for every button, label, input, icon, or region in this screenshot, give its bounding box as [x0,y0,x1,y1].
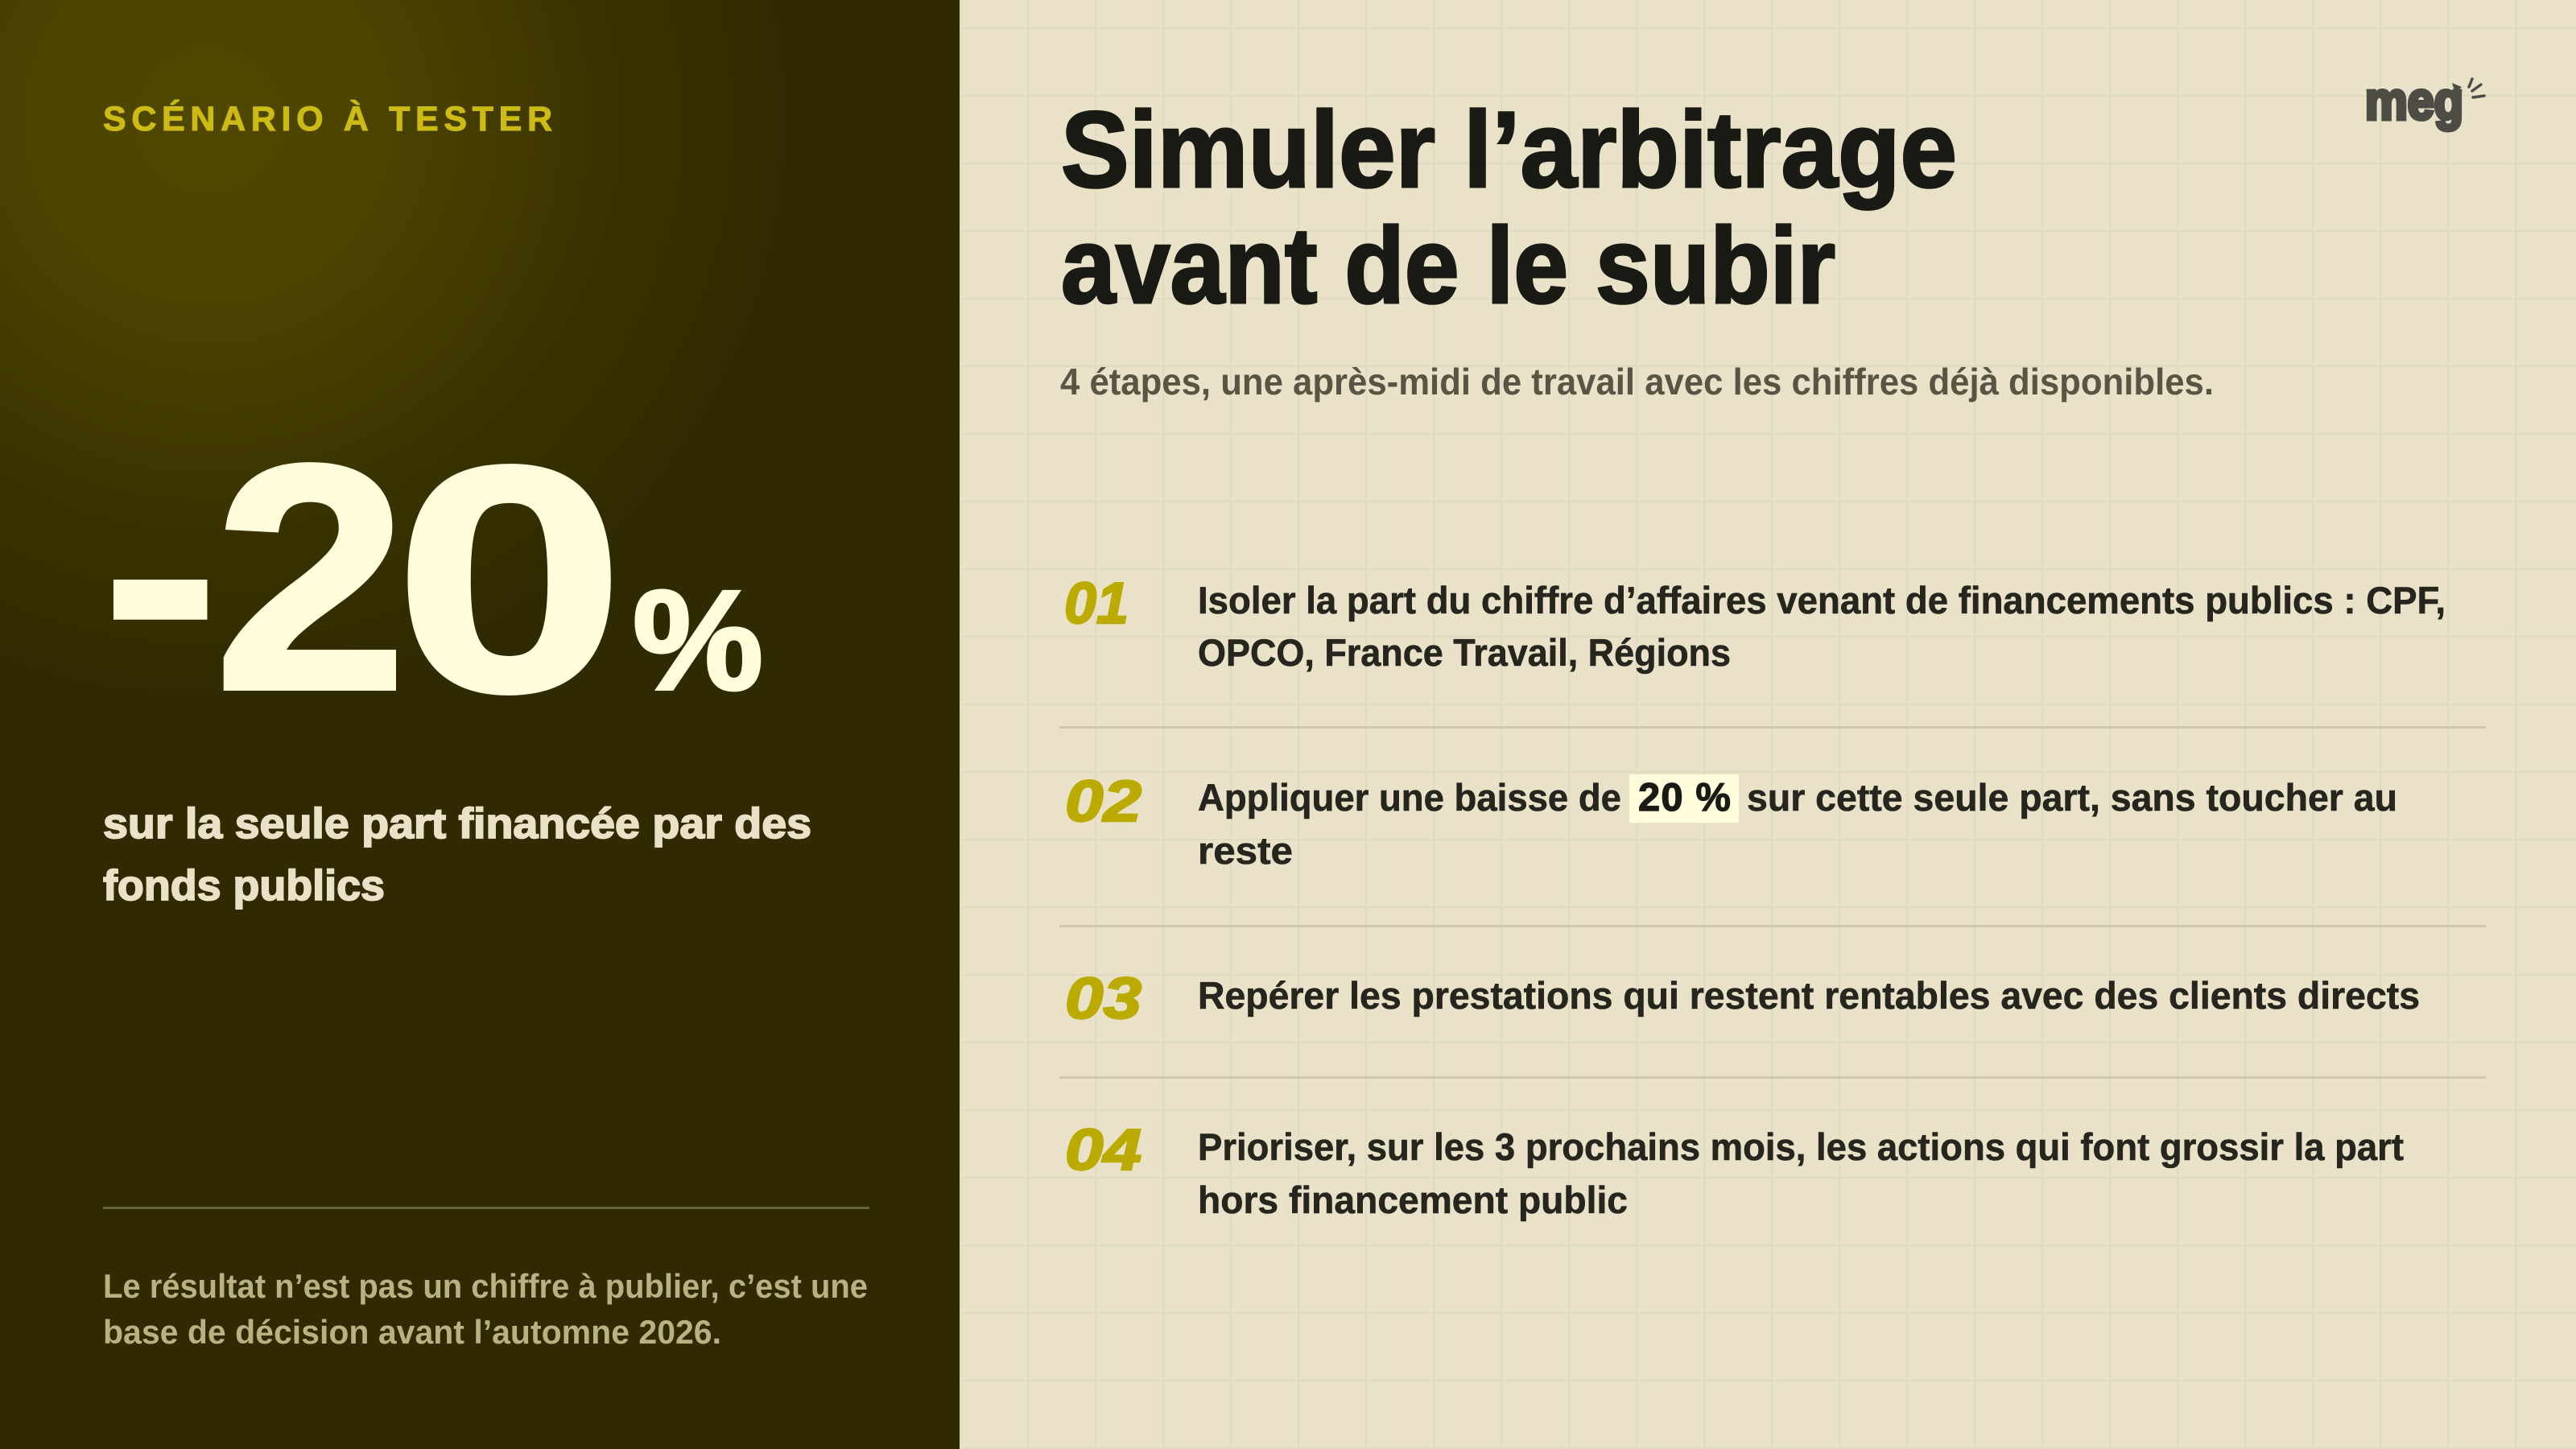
big stat [99,382,763,758]
title [1061,90,1957,326]
step 04: Prioriser, sur les 3 prochains mois, les actions qui font grossir la part [1198,1125,2404,1168]
stat caption: fonds publics [103,862,385,910]
big stat: - [99,382,222,758]
step 02: sur cette seule part, sans toucher au [1747,776,2397,819]
panel: left scenario [0,0,960,1449]
decision note [103,1267,868,1351]
step 04 [1065,1118,2404,1221]
title: avant de le subir [1061,206,1835,326]
big stat: % [633,562,763,720]
panel: right background with grid [960,0,2576,1449]
step 02: Appliquer une baisse de [1198,776,1621,819]
big stat: 2 [214,399,407,757]
eyebrow label: SCÉNARIO À TESTER [103,100,552,138]
step 03: 03 [1065,967,1141,1031]
step 02: reste [1198,829,1293,872]
step 01: 01 [1064,572,1129,636]
step 01: OPCO, France Travail, Régions [1198,631,1731,674]
step 01: Isoler la part du chiffre d’affaires venant de financements publics : CPF, [1198,579,2446,621]
decision note: Le résultat n’est pas un chiffre à publier, c’est une [103,1267,868,1305]
stat caption: sur la seule part financée par des [103,800,811,848]
step 03: Repérer les prestations qui restent rentables avec des clients directs [1198,974,2420,1017]
decision note: base de décision avant l’automne 2026. [103,1313,721,1351]
big stat: 0 [394,401,625,758]
step 04: 04 [1065,1118,1141,1183]
step 04: hors financement public [1198,1179,1628,1221]
step 01 [1064,572,2446,674]
step 02: 02 [1065,770,1141,834]
step 02 [1065,770,2397,872]
title: Simuler l’arbitrage [1061,90,1957,210]
subtitle: 4 étapes, une après-midi de travail avec les chiffres déjà disponibles. [1060,361,2214,402]
stat caption [103,800,811,910]
step 03 [1065,967,2420,1031]
logo: meg: meg [2365,71,2463,130]
highlight: 20 %: 20 % [1638,776,1731,819]
